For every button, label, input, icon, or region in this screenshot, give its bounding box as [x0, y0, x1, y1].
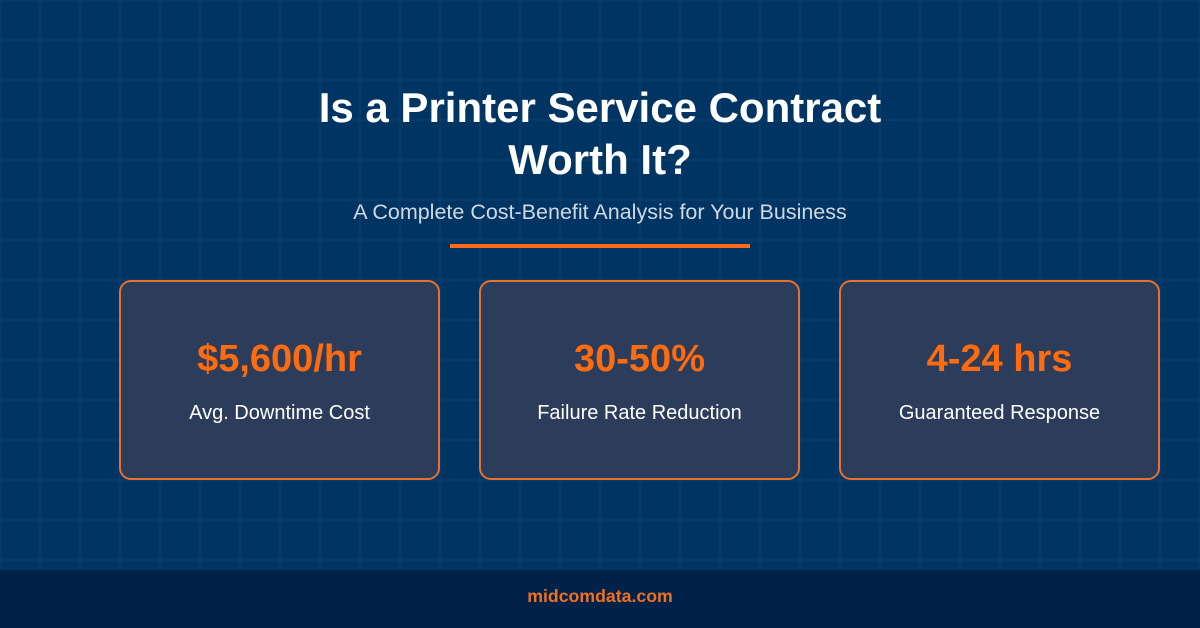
- card: failure rate: Failure Rate Reduction: [537, 402, 742, 424]
- title: [319, 84, 881, 183]
- footer: [0, 570, 1200, 628]
- accent rule: [450, 244, 750, 248]
- card: downtime cost: [119, 280, 440, 480]
- title: Worth It?: [508, 136, 692, 183]
- card: failure rate: [479, 280, 800, 480]
- card: response: [839, 280, 1160, 480]
- card: response: Guaranteed Response: [899, 402, 1100, 424]
- card: response: 4-24 hrs: [927, 338, 1072, 380]
- card: downtime cost: Avg. Downtime Cost: [189, 402, 370, 424]
- title: Is a Printer Service Contract: [319, 84, 881, 131]
- card: failure rate: 30-50%: [574, 338, 705, 380]
- footer: midcomdata.com: [527, 586, 673, 606]
- subtitle: A Complete Cost-Benefit Analysis for Your Business: [353, 200, 847, 224]
- card: downtime cost: $5,600/hr: [197, 338, 362, 380]
